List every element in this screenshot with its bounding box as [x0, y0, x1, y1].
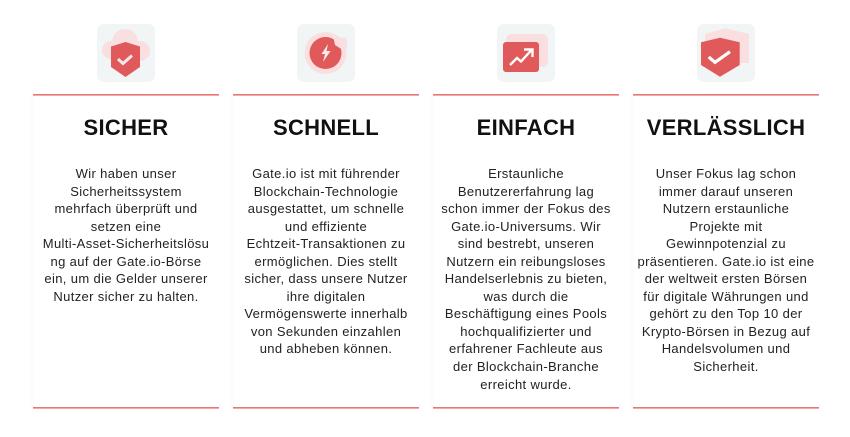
text: schnell: Echtzeit-Transaktionen zu — [247, 236, 405, 251]
text: schnell — [244, 166, 408, 356]
text: verlässlich — [637, 166, 814, 374]
text: sicher: mehrfach überprüft und — [54, 201, 198, 216]
text: einfach: sind bestrebt, unseren — [458, 236, 594, 251]
text: verlässlich: immer darauf unseren — [659, 184, 793, 199]
heading: verlässlich: VERLÄSSLICH — [647, 115, 805, 140]
panel: sicher — [28, 95, 219, 408]
text: schnell: Blockchain-Technologie — [254, 184, 398, 199]
icon: double shield — [697, 24, 755, 82]
icon: shield with cloud — [97, 24, 155, 82]
bottom rule: verlässlich — [633, 407, 819, 409]
text: einfach: Gate.io-Universums. Wir — [451, 219, 601, 234]
heading: sicher: SICHER — [84, 115, 168, 140]
text: einfach — [441, 166, 611, 392]
text: einfach: Handelserlebnis zu bieten, — [445, 271, 607, 286]
top rule: verlässlich — [633, 94, 819, 96]
text: einfach: was durch die — [484, 289, 568, 304]
text: einfach: Benutzererfahrung lag — [458, 184, 594, 199]
text: schnell: von Sekunden einzahlen — [251, 324, 401, 339]
text: sicher: ein, um die Gelder unserer — [44, 271, 208, 286]
text: sicher: Multi-Asset-Sicherheitslösu — [43, 236, 209, 251]
bottom rule: einfach — [433, 407, 619, 409]
text: schnell: Gate.io ist mit führender — [252, 166, 400, 181]
text: schnell: Vermögenswerte innerhalb — [244, 306, 408, 321]
top rule: schnell — [233, 94, 419, 96]
text: verlässlich: Gewinnpotenzial zu — [666, 236, 786, 251]
top rule: einfach — [433, 94, 619, 96]
text: sicher: Wir haben unser — [76, 166, 176, 181]
text: einfach: Erstaunliche — [488, 166, 564, 181]
text: verlässlich: Nutzern erstaunliche — [663, 201, 789, 216]
heading: einfach: EINFACH — [477, 115, 575, 140]
panel: einfach — [428, 95, 619, 408]
text: schnell: ihre digitalen — [287, 289, 365, 304]
text: einfach: der Blockchain-Branche — [453, 359, 599, 374]
text: verlässlich: Sicherheit. — [693, 359, 759, 374]
text: schnell: und effiziente — [285, 219, 367, 234]
text: einfach: Beschäftigung eines Pools — [445, 306, 607, 321]
icon: lightning circle — [297, 24, 355, 82]
top rule: sicher — [33, 94, 219, 96]
text: sicher — [43, 166, 209, 304]
text: verlässlich: Handelsvolumen und — [662, 341, 790, 356]
text: einfach: hochqualifizierter und — [460, 324, 592, 339]
text: verlässlich: präsentieren. Gate.io ist eine — [637, 254, 814, 269]
text: einfach: schon immer der Fokus des — [441, 201, 611, 216]
panel: schnell — [228, 95, 419, 408]
icon: chart card — [497, 24, 555, 82]
text: einfach: erreicht wurde. — [480, 377, 572, 392]
text: verlässlich: der weltweit ersten Börsen — [645, 271, 807, 286]
text: verlässlich: Krypto-Börsen in Bezug auf — [642, 324, 810, 339]
text: sicher: Nutzer sicher zu halten. — [53, 289, 199, 304]
panel: verlässlich — [628, 95, 819, 408]
text: schnell: und abheben können. — [260, 341, 392, 356]
bottom rule: schnell — [233, 407, 419, 409]
text: verlässlich: gehört zu den Top 10 der — [650, 306, 802, 321]
text: sicher: Sicherheitssystem — [70, 184, 182, 199]
text: schnell: sicher, dass unsere Nutzer — [244, 271, 408, 286]
heading: schnell: SCHNELL — [273, 115, 379, 140]
text: einfach: Nutzern ein reibungsloses — [446, 254, 606, 269]
text: schnell: ermöglichen. Dies stellt — [254, 254, 398, 269]
text: sicher: ng auf der Gate.io-Börse — [50, 254, 202, 269]
text: sicher: setzen eine — [91, 219, 161, 234]
text: einfach: erfahrener Fachleute aus — [449, 341, 603, 356]
text: verlässlich: für digitale Währungen und — [643, 289, 809, 304]
text: schnell: ausgestattet, um schnelle — [248, 201, 404, 216]
text: verlässlich: Projekte mit — [690, 219, 762, 234]
text: verlässlich: Unser Fokus lag schon — [656, 166, 796, 181]
bottom rule: sicher — [33, 407, 219, 409]
